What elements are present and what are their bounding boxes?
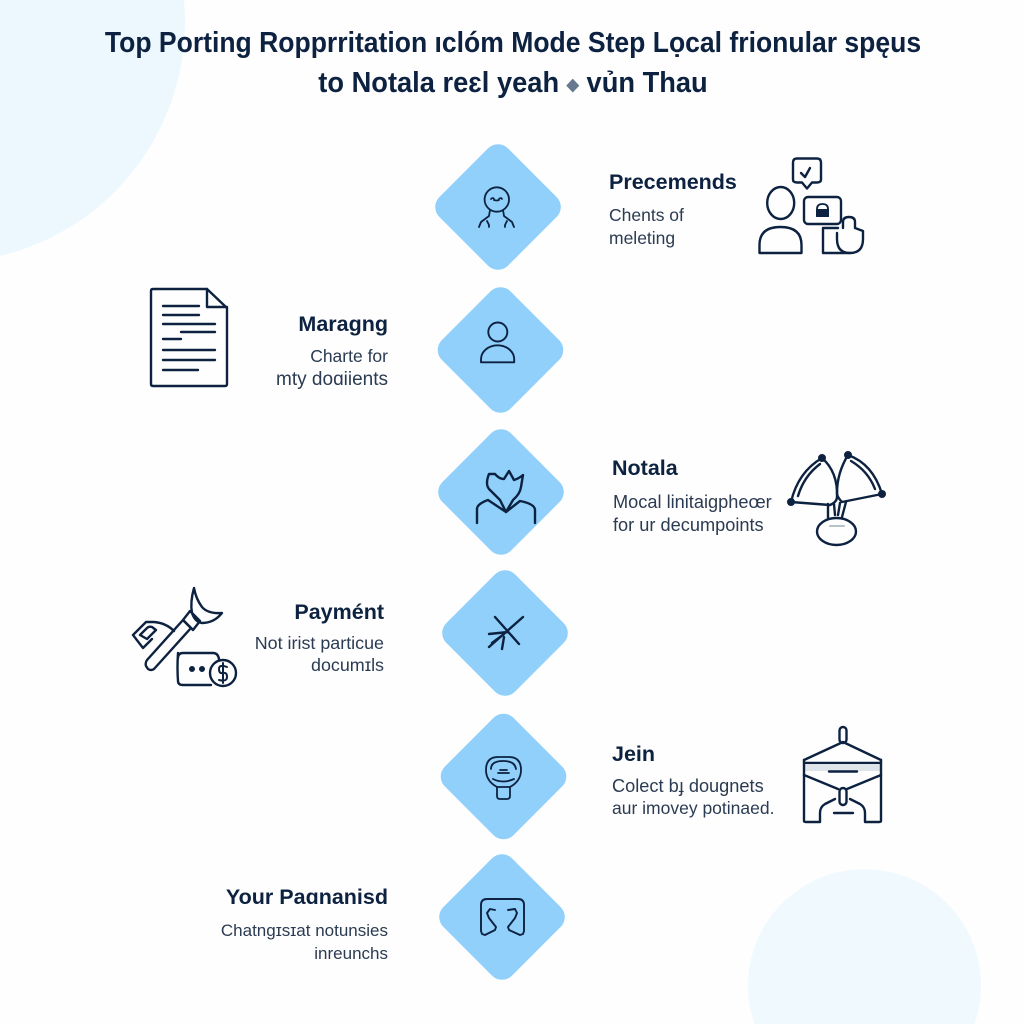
icon: head in diamond 1 <box>479 187 514 227</box>
description: Charte for <box>310 346 388 366</box>
description <box>612 776 774 818</box>
step 3: Notala <box>612 456 772 535</box>
description: Chents of <box>609 205 684 225</box>
icon: person in diamond 2 <box>481 322 514 362</box>
diamond 1 <box>429 138 567 276</box>
icon: figure in diamond 3 <box>477 471 535 523</box>
description <box>255 633 384 674</box>
diamond 4 <box>436 564 574 702</box>
title: to Notala reɛl yeah ◆ vủn Thau <box>318 67 708 99</box>
circle top left <box>0 0 185 256</box>
description: Colect bɟ dougnets <box>612 776 764 796</box>
diamond 3 <box>432 423 570 561</box>
description: inreunchs <box>314 944 388 962</box>
heading: Paymént <box>294 600 384 624</box>
description: Not irist particue <box>255 633 384 653</box>
icon: cross in diamond 4 <box>489 617 523 649</box>
step 5: Jein <box>612 742 774 818</box>
step 4: Payment <box>255 600 384 674</box>
icon: document <box>151 289 227 386</box>
description: meleting <box>609 228 675 248</box>
icon: envelope house <box>804 727 881 822</box>
description <box>276 346 388 390</box>
heading: Precemends <box>609 170 737 194</box>
diamond 6 <box>433 848 571 986</box>
title <box>105 27 921 99</box>
description: Chatngɪsɪat notunsies <box>221 921 388 940</box>
heading: Notala <box>612 456 678 480</box>
icon: people and security <box>760 158 863 253</box>
description <box>613 492 772 535</box>
step 6: Your Paenanisd <box>221 885 388 962</box>
icon: face frame in diamond 6 <box>481 899 524 935</box>
description <box>221 921 388 962</box>
diamond 5 <box>435 708 572 845</box>
icon: lamp shapes <box>788 452 885 545</box>
circle bottom right <box>748 869 981 1024</box>
diamond 2 <box>432 281 569 419</box>
icon: tool and coin <box>133 588 236 686</box>
icon: helmet in diamond 5 <box>486 757 521 799</box>
description: aur imovey potinaed. <box>612 798 774 818</box>
title: Top Porting Ropprritation ıclóm Mode Step Lọcal frionular spęus <box>105 27 921 59</box>
description <box>609 205 684 248</box>
description: documɪls <box>311 654 384 674</box>
step 2: Maragng <box>276 312 388 390</box>
heading: Maragng <box>298 312 388 336</box>
step 1: Precemends <box>609 170 737 248</box>
heading: Jein <box>612 742 655 766</box>
description: mty doɑiients <box>276 368 388 390</box>
description: for ur decumpoints <box>613 514 764 534</box>
description: Mocal linitaigpheœr <box>613 492 772 512</box>
heading: Your Paɑnanisd <box>226 885 388 909</box>
